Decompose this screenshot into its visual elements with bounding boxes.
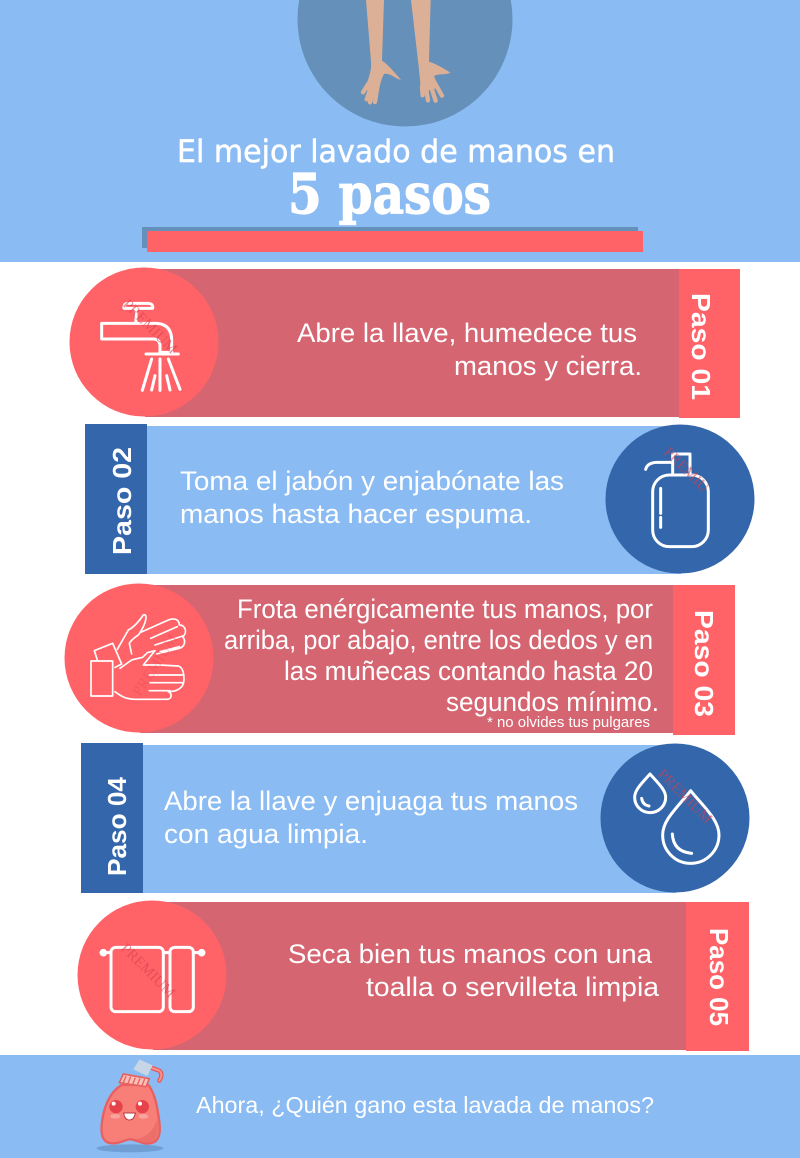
step label: Paso 02 [107,447,137,555]
step text [164,786,578,849]
header panel [0,0,800,262]
icon: hands [91,615,185,699]
panel: paso 01 [70,268,740,418]
icon: water drops [635,774,719,863]
title underline bars [142,227,643,252]
panel: paso 03 [64,584,735,735]
panel: paso 04 [81,743,750,893]
icon: soap mascot [97,1059,163,1152]
panel: paso 05 [78,900,749,1051]
step text: Abre la llave y enjuaga tus manos [164,786,578,816]
step text: segundos mínimo. [446,687,659,717]
step label: Paso 04 [102,776,132,876]
step text: las muñecas contando hasta 20 [284,656,653,686]
step text: Seca bien tus manos con una [288,939,653,969]
step text [224,594,659,731]
illustration: arms and hands in circle [298,0,512,126]
panel: paso 02 [85,424,754,574]
step text: Frota enérgicamente tus manos, por [237,594,653,624]
title [177,134,615,226]
title: El mejor lavado de manos en [177,134,615,170]
icon: soap dispenser [646,454,708,547]
step text [180,466,564,529]
step text: arriba, por abajo, entre los dedos y en [224,625,653,655]
panel: paso 04: PREMIUM [654,767,715,827]
icon: towels [101,947,204,1012]
step text [288,939,660,1002]
panel: paso 05: PREMIUM [117,941,178,1001]
step text: * no olvides tus pulgares [487,714,650,731]
panel: paso 01: PREMIUM [119,297,180,357]
step text [297,318,642,381]
panel: paso 03: PREMIUM [130,632,181,699]
title: 5 pasos [288,161,491,226]
step label: Paso 01 [686,293,716,400]
panel: paso 02: PREMIU [660,445,712,496]
step text: Abre la llave, humedece tus [297,318,637,348]
step label: Paso 05 [704,928,734,1026]
icon: faucet [102,303,180,390]
step text: manos hasta hacer espuma. [180,499,532,529]
step text: Toma el jabón y enjabónate las [180,466,564,496]
step text: toalla o servilleta limpia [366,972,660,1002]
step text: con agua limpia. [164,819,368,849]
footer panel [0,1055,800,1158]
step label: Paso 03 [689,610,719,717]
closing question: Ahora, ¿Quién gano esta lavada de manos? [196,1092,654,1118]
step text: manos y cierra. [454,351,642,381]
